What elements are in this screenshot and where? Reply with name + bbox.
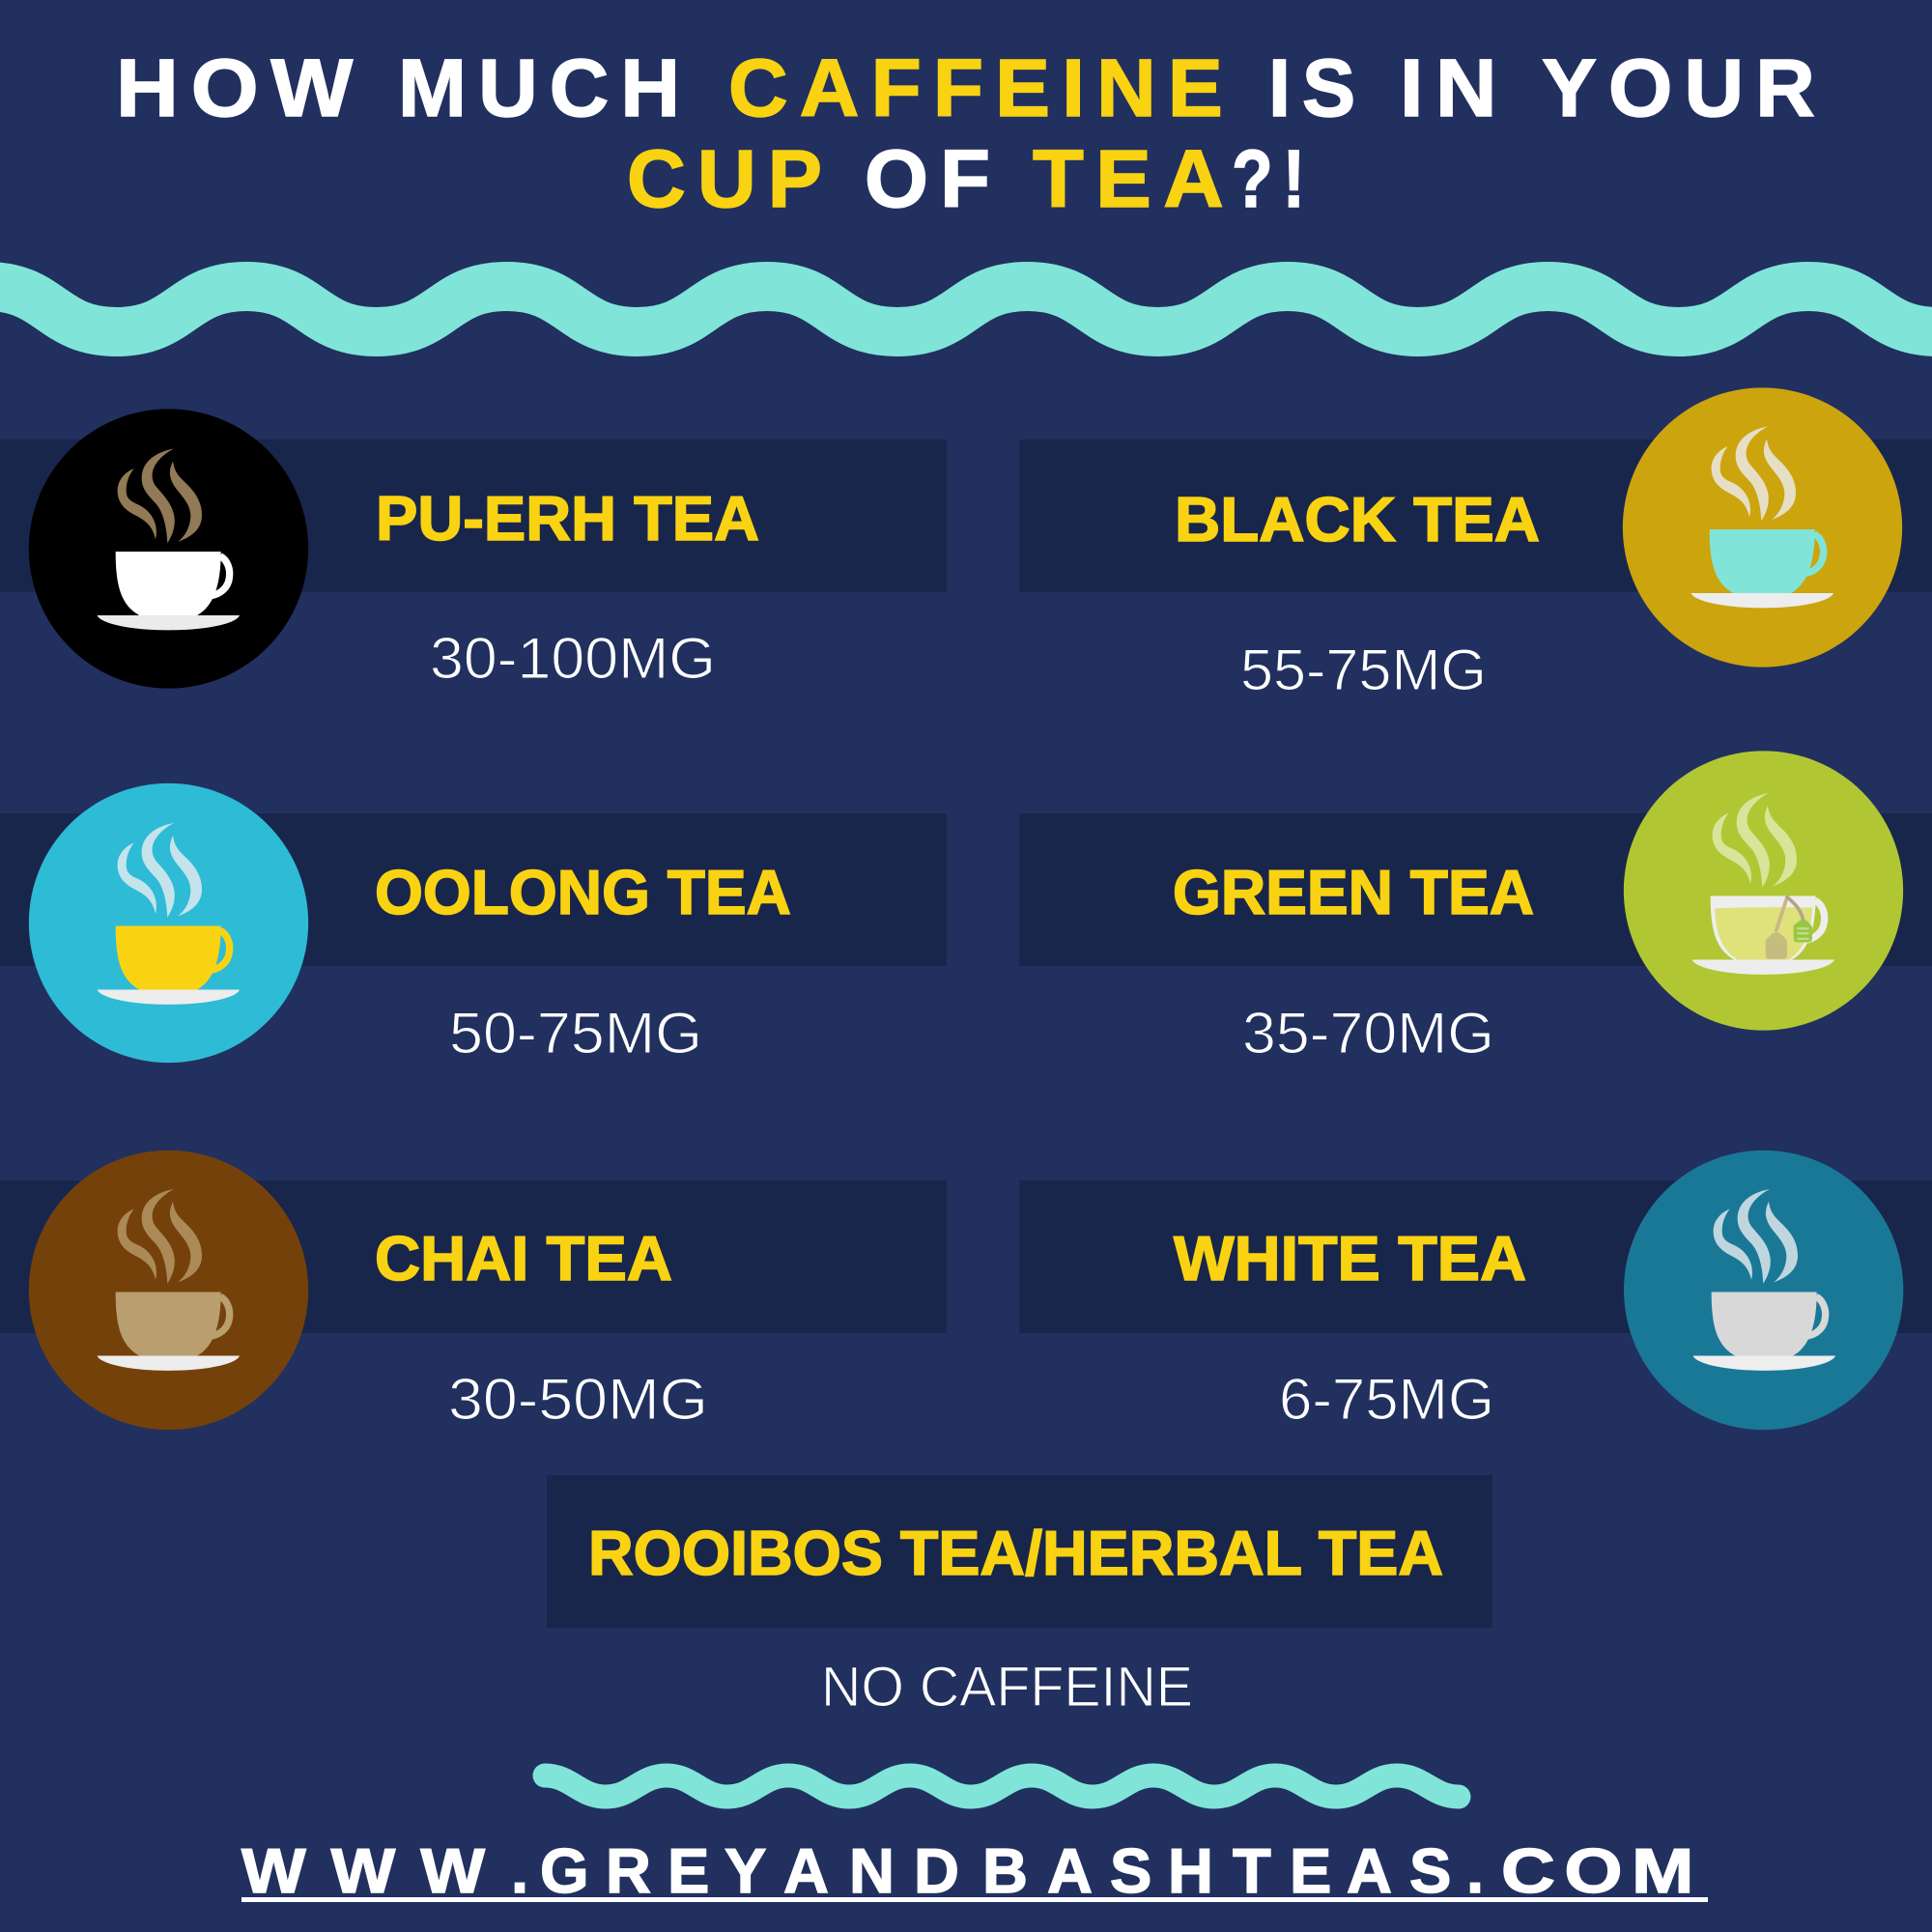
value: green caffeine: 35-70MG	[1242, 1001, 1494, 1065]
title: OF	[865, 133, 1002, 224]
website link: COM	[1501, 1835, 1703, 1906]
title: CUP	[627, 133, 834, 224]
icon: tan cup	[29, 1151, 308, 1430]
title	[116, 43, 1827, 224]
wave divider	[0, 286, 1932, 332]
heading: pu-erh tea: PU-ERH TEA	[376, 483, 759, 554]
value: white caffeine: 6-75MG	[1279, 1367, 1494, 1432]
title: YOUR	[1542, 43, 1827, 133]
title: MUCH	[398, 43, 692, 133]
website link	[242, 1835, 1708, 1906]
value: oolong caffeine: 50-75MG	[449, 1001, 702, 1065]
website link: WWW	[242, 1835, 510, 1906]
heading: chai tea: CHAI TEA	[375, 1223, 672, 1293]
heading: rooibos tea / herbal tea: ROOIBOS TEA/HERBAL TEA	[588, 1518, 1443, 1588]
panel: chai tea	[0, 1151, 947, 1432]
panel: white tea	[1019, 1151, 1932, 1432]
panel: black tea	[1019, 387, 1932, 702]
heading: white tea: WHITE TEA	[1174, 1223, 1526, 1293]
title: IN	[1400, 43, 1509, 133]
heading: green tea: GREEN TEA	[1173, 857, 1534, 927]
panel: rooibos and herbal tea	[547, 1475, 1492, 1719]
panel: pu-erh tea	[0, 409, 947, 691]
value: black caffeine: 55-75MG	[1240, 638, 1487, 702]
heading: oolong tea: OOLONG TEA	[375, 857, 791, 927]
title: CAFFEINE	[728, 43, 1235, 133]
website link: .GREYANDBASHTEAS.	[511, 1835, 1484, 1906]
value: no caffeine: NO CAFFEINE	[821, 1656, 1193, 1719]
icon: black cup	[29, 409, 308, 689]
title: IS	[1268, 43, 1367, 133]
small wave divider	[545, 1776, 1459, 1797]
title: TEA	[1033, 133, 1236, 224]
value: pu-erh caffeine: 30-100MG	[430, 626, 716, 691]
icon: grey cup	[1624, 1151, 1903, 1430]
icon: yellow cup	[29, 783, 308, 1063]
panel: green tea	[1019, 751, 1932, 1065]
title: HOW	[116, 43, 365, 133]
panel: oolong tea	[0, 783, 947, 1065]
title: ?!	[1232, 133, 1315, 224]
heading: black tea: BLACK TEA	[1175, 484, 1540, 554]
icon: aqua cup	[1623, 387, 1902, 668]
value: chai caffeine: 30-50MG	[448, 1367, 708, 1432]
icon: green tea cup with teabag	[1624, 751, 1903, 1031]
